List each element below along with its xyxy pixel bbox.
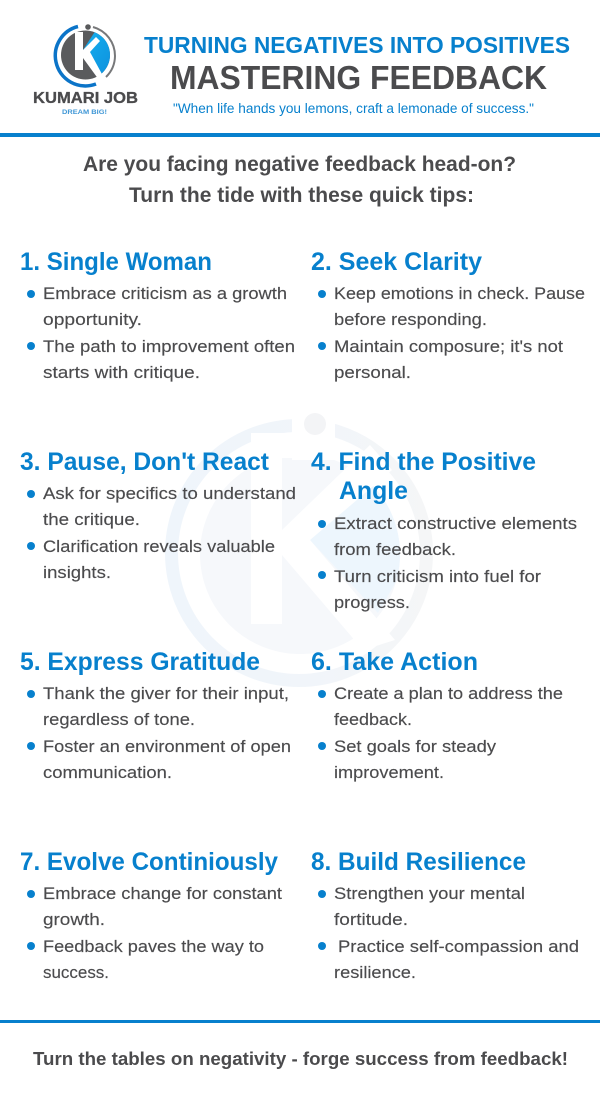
tip 2: personal.	[334, 363, 411, 382]
header: quote: "When life hands you lemons, craft a lemonade of success."	[173, 101, 534, 116]
tip 2	[311, 248, 585, 382]
tip 8: 8. Build Resilience	[311, 848, 526, 876]
tip 7: success.	[43, 963, 109, 982]
tip 8: resilience.	[334, 963, 416, 982]
watermark logo	[172, 410, 426, 680]
header: main title: MASTERING FEEDBACK	[170, 59, 547, 96]
tip 7: 7. Evolve Continiously	[20, 848, 278, 876]
tip 7: Embrace change for constant	[43, 884, 282, 903]
footer rule	[0, 1020, 600, 1023]
tip 7: growth.	[43, 910, 105, 929]
tip 3: the critique.	[43, 510, 140, 529]
tip 3	[20, 448, 296, 582]
tip 1: Embrace criticism as a growth	[43, 284, 287, 303]
tip 1: The path to improvement often	[43, 337, 295, 356]
intro question: Are you facing negative feedback head-on?	[83, 153, 516, 176]
tip 1: opportunity.	[43, 310, 142, 329]
tip 2: before responding.	[334, 310, 487, 329]
tip 6	[311, 648, 563, 782]
tip 5: regardless of tone.	[43, 710, 195, 729]
tip 5: Thank the giver for their input,	[43, 684, 289, 703]
tip 8: Strengthen your mental	[334, 884, 525, 903]
tip 2: Keep emotions in check. Pause	[334, 284, 585, 303]
tip 3: Clarification reveals valuable	[43, 537, 275, 556]
tip 5: 5. Express Gratitude	[20, 648, 260, 676]
tip 2: Maintain composure; it's not	[334, 337, 563, 356]
footer message: Turn the tables on negativity - forge success from feedback!	[33, 1048, 568, 1069]
logo: DREAM BIG!	[62, 110, 107, 116]
tip 4: 4. Find the Positive	[311, 448, 536, 476]
tip 8	[311, 848, 579, 982]
tip 1: 1. Single Woman	[20, 248, 212, 276]
tip 6: feedback.	[334, 710, 412, 729]
tip 2: 2. Seek Clarity	[311, 248, 482, 276]
tip 4: from feedback.	[334, 540, 456, 559]
logo: KUMARI JOB	[33, 90, 138, 107]
tip 3: insights.	[43, 563, 111, 582]
logo	[33, 24, 138, 116]
tip 3: Ask for specifics to understand	[43, 484, 296, 503]
tip 6: improvement.	[334, 763, 444, 782]
tip 1: starts with critique.	[43, 363, 200, 382]
tip 8: fortitude.	[334, 910, 408, 929]
tip 4: progress.	[334, 593, 410, 612]
tip 6: Set goals for steady	[334, 737, 497, 756]
tip 7	[20, 848, 282, 982]
tip 3: 3. Pause, Don't React	[20, 448, 270, 476]
intro question	[83, 153, 516, 207]
tip 4: Extract constructive elements	[334, 514, 577, 533]
intro question: Turn the tide with these quick tips:	[129, 184, 474, 207]
tip 8: Practice self-compassion and	[338, 937, 579, 956]
tip 5: communication.	[43, 763, 172, 782]
header: kicker: TURNING NEGATIVES INTO POSITIVES	[144, 32, 570, 58]
tip 4: Angle	[339, 477, 408, 505]
tip 4: Turn criticism into fuel for	[334, 567, 541, 586]
tip 5: Foster an environment of open	[43, 737, 291, 756]
tip 7: Feedback paves the way to	[43, 937, 264, 956]
tip 6: Create a plan to address the	[334, 684, 563, 703]
tip 1	[20, 248, 295, 382]
tip 5	[20, 648, 291, 782]
header rule	[0, 133, 600, 137]
tip 4	[311, 448, 577, 612]
tip 6: 6. Take Action	[311, 648, 478, 676]
